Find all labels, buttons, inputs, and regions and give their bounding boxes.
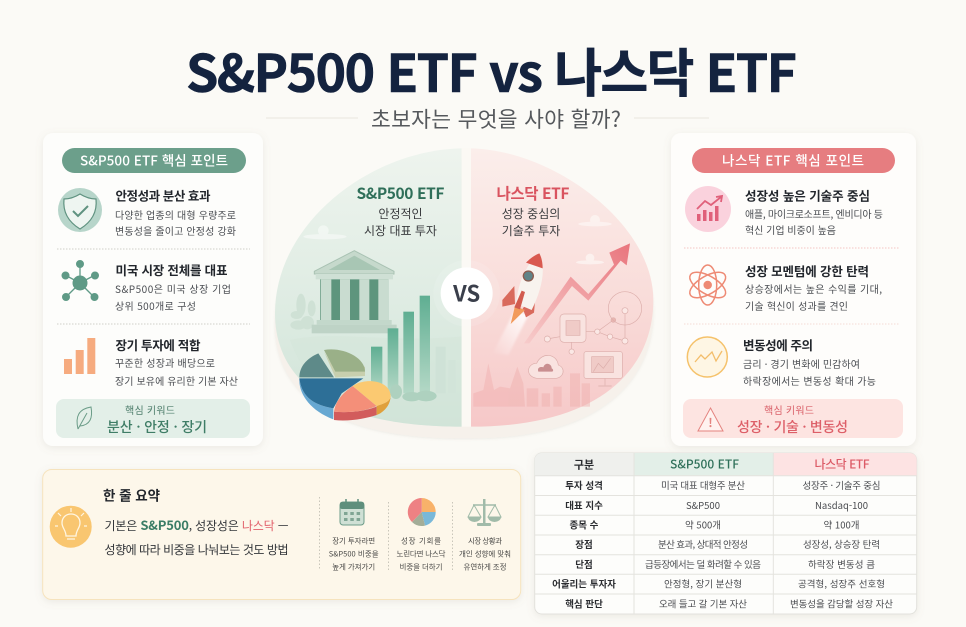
point: market: 미국 시장 전체를 대표 (116, 260, 228, 279)
point: stability: 다양한 업종의 대형 우량주로 (115, 207, 236, 222)
bar chart: green (371, 296, 456, 401)
heading pill: Nasdaq (692, 148, 895, 173)
row: 어울리는 투자자 (552, 576, 885, 590)
summary heading: 한 줄 요약 (103, 484, 160, 504)
center label: S&P500 (356, 182, 444, 239)
point: long-term: 장기 보유에 유리한 기본 자산 (115, 373, 238, 388)
table header: S&P500 ETF (670, 456, 739, 472)
icon: shield (58, 188, 102, 232)
point: stability: 안정성과 분산 효과 (116, 186, 211, 204)
clouds (303, 225, 347, 239)
tip: calendar: 높게 가져가기 (332, 562, 375, 572)
point: caution: 금리 · 경기 변화에 민감하여 (743, 356, 860, 371)
panel: one-line summary (43, 470, 521, 600)
point: momentum: 상승장에서는 높은 수익를 기대, (745, 281, 882, 296)
summary text (104, 515, 289, 558)
panel half: S&P500 side (275, 148, 462, 427)
row: 핵심 판단: 오래 들고 갈 기본 자산 (659, 596, 747, 610)
point: caution: 변동성에 주의 (743, 335, 813, 354)
icon: light bulb (50, 506, 92, 548)
row: 장점 (575, 537, 880, 551)
point: tech: 성장성 높은 기술주 중심 (745, 186, 870, 204)
point: market: S&P500은 미국 상장 기업 (115, 281, 231, 296)
tip: scales (459, 499, 511, 572)
icon: growth chart (685, 186, 731, 232)
center comparison illustration (275, 148, 653, 438)
point: caution: 하락장에서는 변동성 확대 가능 (743, 373, 876, 388)
center label: Nasdaq: 성장 중심의 (502, 205, 560, 222)
panel: Nasdaq key points (671, 133, 916, 446)
title: S&P500 ETF vs 나스닥 ETF (186, 32, 797, 107)
point: stability: 변동성을 줄이고 안정성 강화 (115, 223, 236, 238)
row: 투자 성격: 투자 성격 (565, 478, 603, 492)
tip: calendar (329, 499, 379, 572)
row: 단점: 하락장 변동성 큼 (808, 557, 875, 571)
landscape: left ground (290, 336, 462, 427)
row: 장점: 장점 (575, 537, 593, 551)
point: long-term (115, 335, 238, 388)
point: caution (743, 335, 876, 388)
base plate (275, 160, 653, 438)
icon: volatility (687, 337, 727, 377)
keywords: S&P500: 핵심 키워드 (125, 402, 175, 417)
row: 장점: 분산 효과, 상대적 안정성 (658, 537, 748, 551)
subtitle: 초보자는 무엇을 사야 할까? (371, 103, 621, 134)
table header: 구분 (574, 456, 594, 472)
point: market: 상위 500개로 구성 (115, 298, 196, 313)
keywords: Nasdaq: 핵심 키워드 (764, 402, 814, 417)
VS badge: VS (452, 276, 480, 308)
heading pill: S&P500: S&P500 ETF 핵심 포인트 (80, 150, 228, 170)
point: tech: 애플, 마이크로소프트, 엔비디아 등 (745, 206, 883, 221)
tip: calendar: 장기 투자라면 (332, 536, 375, 546)
row: 투자 성격 (565, 478, 880, 492)
keywords: Nasdaq (683, 399, 903, 438)
keywords: Nasdaq: 성장 · 기술 · 변동성 (737, 417, 848, 437)
row: 투자 성격: 미국 대표 대형주 분산 (661, 478, 745, 492)
icon: temple (312, 251, 397, 333)
summary text: 기본은 S&P500, 성장성은 나스닥 — (104, 515, 289, 534)
center label: S&P500: S&P500 ETF (356, 182, 444, 204)
tip: scales: 개인 성향에 맞춰 (459, 548, 511, 560)
comparison table (535, 453, 917, 614)
point: momentum (745, 261, 882, 313)
point: stability (115, 186, 236, 238)
tech icons (529, 292, 642, 386)
keywords: S&P500: 분산 · 안정 · 장기 (107, 417, 207, 437)
row: 어울리는 투자자: 공격형, 성장주 선호형 (798, 576, 885, 590)
row: 어울리는 투자자: 안정형, 장기 분산형 (664, 576, 742, 590)
icon: plant (290, 294, 316, 330)
rocket trail (493, 310, 528, 355)
summary text: 성향에 따라 비중을 나눠보는 것도 방법 (104, 541, 288, 558)
row: 종목 수: 약 100개 (824, 518, 859, 532)
icon: bars (64, 338, 95, 374)
center label: S&P500: 안정적인 (378, 205, 423, 222)
trend arrow (524, 243, 630, 343)
row: 종목 수 (570, 518, 859, 532)
row: 단점: 단점 (575, 557, 593, 571)
heading pill: Nasdaq: 나스닥 ETF 핵심 포인트 (722, 150, 864, 170)
center label: Nasdaq: 나스닥 ETF (496, 182, 570, 204)
table header: 나스닥 ETF (814, 456, 870, 472)
row: 종목 수: 종목 수 (570, 518, 599, 532)
tip: pie chart: 성장 기회를 (401, 536, 441, 546)
keywords: S&P500 (56, 399, 250, 438)
VS badge (441, 267, 493, 319)
point: tech (745, 186, 883, 237)
tip: scales: 유연하게 조정 (464, 562, 506, 572)
row: 장점: 성장성, 상승장 탄력 (803, 537, 880, 551)
icon: atom (686, 265, 730, 305)
tip: scales: 시장 상황과 (468, 536, 502, 546)
point: tech: 혁신 기업 비중이 높음 (745, 222, 836, 237)
point: momentum: 성장 모멘텀에 강한 탄력 (745, 261, 869, 280)
row: 핵심 판단 (565, 596, 893, 610)
point: long-term: 꾸준한 성장과 배당으로 (115, 355, 215, 370)
row: 어울리는 투자자: 어울리는 투자자 (552, 576, 616, 590)
row: 단점: 급등장에서는 덜 화려할 수 있음 (645, 557, 761, 571)
row: 대표 지수: 대표 지수 (565, 498, 603, 512)
center label: Nasdaq (496, 182, 570, 239)
center label: S&P500: 시장 대표 투자 (364, 222, 437, 239)
row: 투자 성격: 성장주 · 기술주 중심 (802, 478, 880, 492)
panel: S&P500 key points (43, 133, 263, 446)
pie chart 3D (299, 349, 391, 420)
point: market (115, 260, 231, 313)
row: 대표 지수: Nasdaq-100 (815, 498, 868, 512)
center label: Nasdaq: 기술주 투자 (502, 222, 560, 239)
icon: network (62, 260, 98, 300)
row: 핵심 판단: 변동성을 감당할 성장 자산 (790, 596, 893, 610)
tip: calendar: S&P500 비중을 (329, 548, 379, 560)
row: 대표 지수: S&P500 (686, 498, 720, 512)
tip: pie chart: 노린다면 나스닥 (396, 548, 446, 560)
point: long-term: 장기 투자에 적합 (116, 335, 201, 354)
point: momentum: 기술 혁신이 성과를 견인 (745, 298, 848, 313)
tip: pie chart (396, 498, 446, 572)
row: 핵심 판단: 핵심 판단 (565, 596, 603, 610)
row: 대표 지수 (565, 498, 868, 512)
heading pill: S&P500 (62, 148, 246, 173)
row: 종목 수: 약 500개 (685, 518, 721, 532)
icon: rocket (502, 253, 543, 324)
table header (535, 453, 917, 476)
divider: white center band (462, 148, 471, 427)
keywords: Nasdaq: ! (708, 414, 713, 431)
skyline: right (473, 363, 590, 407)
row: 단점 (575, 557, 875, 571)
tip: pie chart: 비중을 더하기 (400, 562, 442, 572)
panel half: Nasdaq side (471, 148, 653, 427)
